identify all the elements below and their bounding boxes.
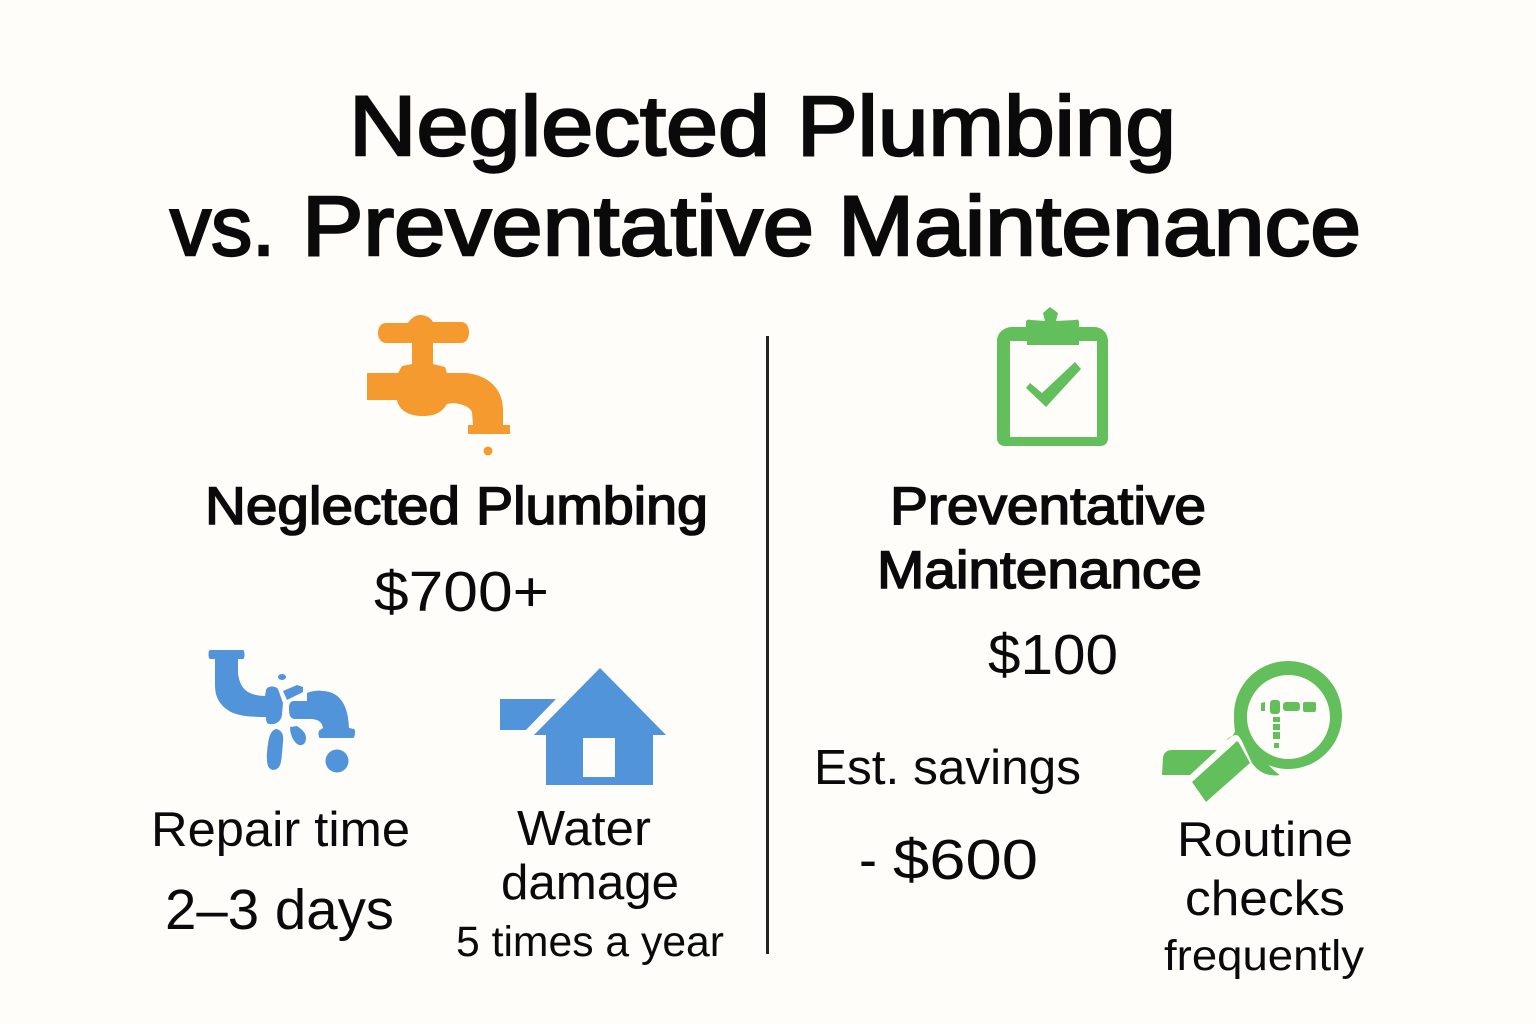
heading: preventative maintenance: Preventative [890,477,1206,536]
cost: $100: $100 [988,623,1118,687]
cost: $700+: $700+ [374,560,549,624]
label: routine checks: Routine [1177,813,1353,867]
label: water damage [501,802,679,910]
value: 2-3 days: 2–3 days [165,878,394,942]
icon: clipboard with check [997,307,1108,446]
title [170,79,1361,273]
heading: neglected plumbing [205,477,708,536]
value: frequently: frequently [1164,932,1365,980]
value: savings $600: $600 [893,828,1038,892]
heading: neglected plumbing: Neglected [205,477,460,536]
title: Plumbing [797,79,1176,173]
label: repair time: Repair time [151,803,410,857]
label: water damage: damage [501,856,679,910]
label: water damage: Water [517,802,651,856]
label: routine checks [1177,813,1353,926]
divider [766,336,769,954]
title: Preventative [302,179,814,273]
heading: preventative maintenance [877,477,1206,600]
icon: leaking faucet [367,315,510,456]
heading: preventative maintenance: Maintenance [877,541,1202,600]
icon: water damaged house [500,668,666,785]
panel: neglected plumbing [151,315,724,966]
value: savings $600: - [859,828,877,892]
icon: magnifier inspecting pipe [1162,661,1342,802]
title: Maintenance [838,179,1361,273]
title: vs. [170,179,275,273]
label: routine checks: checks [1185,872,1345,926]
label: estimated savings: Est. savings [814,741,1081,795]
heading: neglected plumbing: Plumbing [476,477,708,536]
panel: preventative maintenance [814,307,1365,980]
icon: burst pipe [208,650,355,772]
value: 5 times a year: 5 times a year [456,918,724,966]
title: Neglected [349,79,770,173]
